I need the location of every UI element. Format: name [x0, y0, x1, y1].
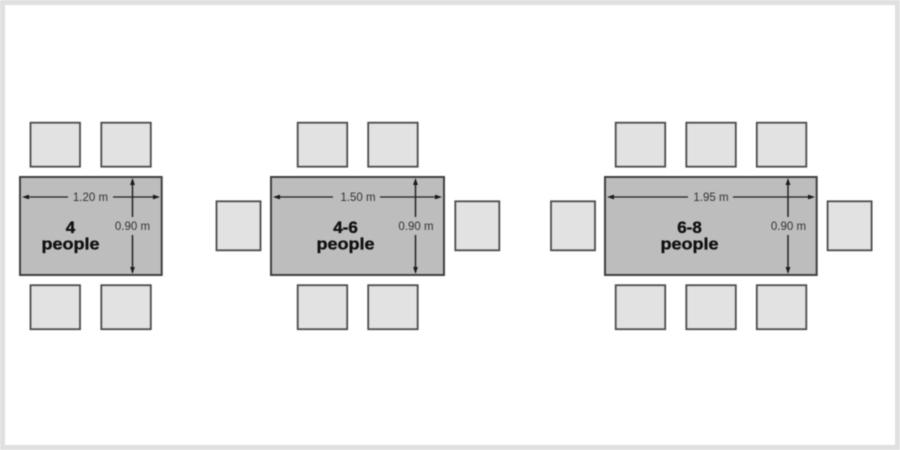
chair: top left — [298, 123, 347, 167]
width label: 1.20 m — [73, 192, 108, 204]
width dimension arrow — [607, 195, 815, 199]
chair: top left — [30, 123, 80, 167]
capacity label — [316, 218, 374, 254]
chair: top right — [757, 123, 806, 167]
width label: 1.95 m — [693, 192, 729, 204]
chair: right end — [828, 201, 872, 250]
capacity label: 4-6 — [333, 218, 358, 237]
capacity label — [42, 218, 100, 254]
chair: top middle — [686, 123, 736, 167]
chair: top left — [616, 123, 665, 167]
capacity label: 6-8 — [677, 218, 702, 237]
panel: table for 4-6 people — [216, 123, 499, 329]
table top — [271, 177, 444, 275]
chair: top right — [101, 123, 151, 167]
chair: bottom right — [101, 285, 151, 329]
chair: bottom right — [368, 285, 418, 329]
chair: bottom left — [616, 285, 665, 329]
capacity label: people — [660, 234, 718, 254]
depth label: 0.90 m — [115, 221, 150, 233]
chair: bottom left — [30, 285, 80, 329]
table top — [20, 177, 162, 275]
depth dimension arrow — [130, 178, 135, 274]
capacity label — [660, 218, 718, 254]
chair: bottom middle — [686, 285, 736, 329]
width label: 1.50 m — [340, 192, 376, 204]
capacity label: 4 — [66, 218, 76, 237]
width dimension arrow — [273, 195, 442, 199]
panel: table for 4 people — [20, 123, 162, 329]
capacity label: people — [42, 234, 100, 254]
width dimension arrow — [22, 195, 160, 199]
chair: left end — [216, 201, 260, 250]
capacity label: people — [316, 234, 374, 254]
chair: top right — [368, 123, 418, 167]
depth label: 0.90 m — [398, 221, 434, 233]
chair: right end — [455, 201, 499, 250]
depth dimension arrow — [413, 178, 418, 274]
chair: bottom right — [757, 285, 806, 329]
chair: bottom left — [298, 285, 347, 329]
depth dimension arrow — [786, 178, 790, 274]
panel: table for 6-8 people — [551, 123, 872, 329]
chair: left end — [551, 201, 595, 250]
table top — [605, 177, 817, 275]
depth label: 0.90 m — [771, 221, 806, 233]
